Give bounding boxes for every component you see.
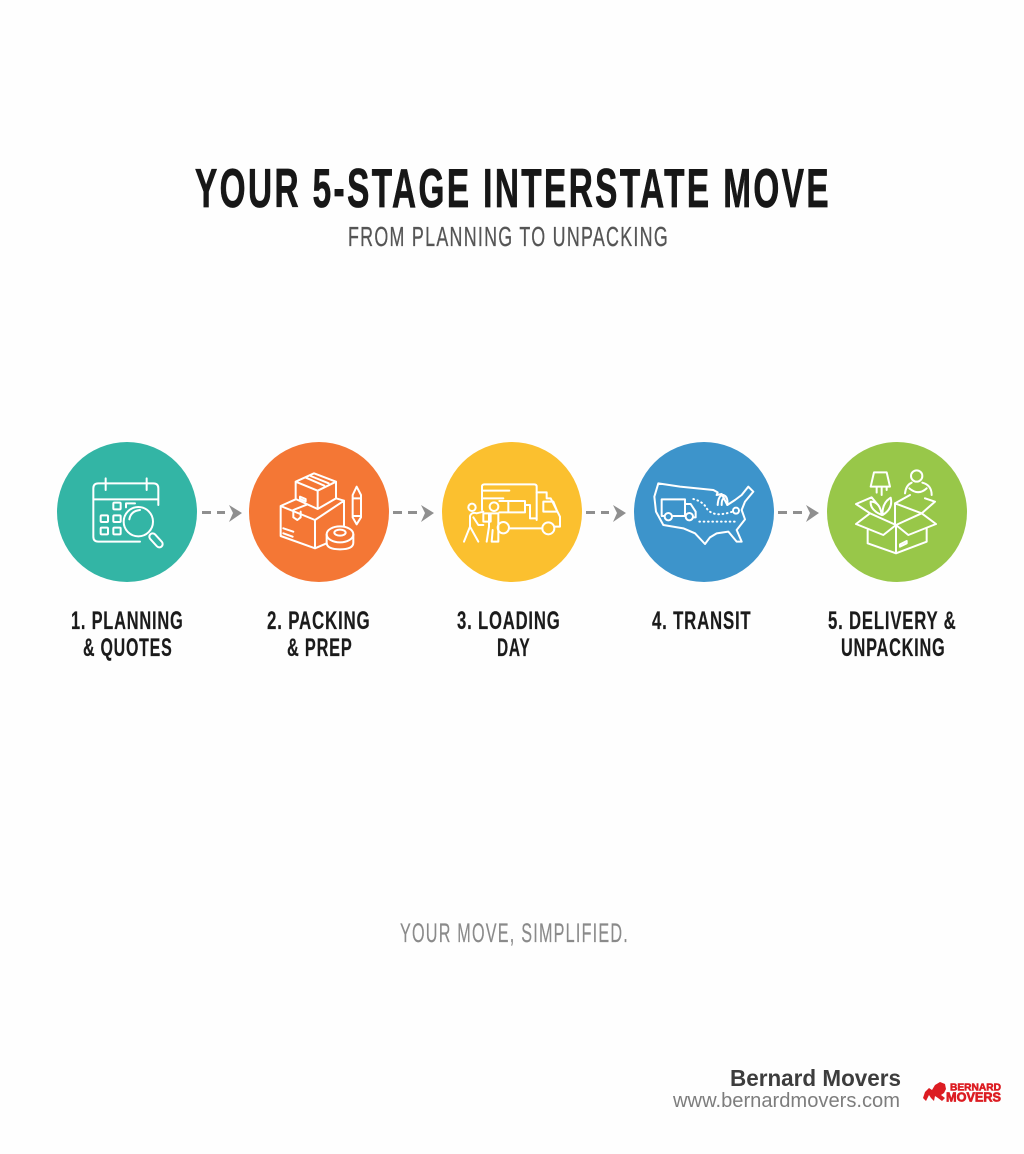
label: delivery and unpacking: 5. DELIVERY & bbox=[828, 607, 956, 635]
icon: open box with lamp, plant and person bbox=[856, 470, 936, 553]
footer: company name: Bernard Movers bbox=[730, 1065, 901, 1091]
label: loading day: 3. LOADING bbox=[457, 607, 560, 635]
footer: website: www.bernardmovers.com bbox=[672, 1090, 900, 1112]
icon: boxes, tape and pencil bbox=[281, 473, 361, 549]
teal circle bbox=[57, 442, 197, 582]
arrow: stage 2 to 3 bbox=[393, 505, 434, 522]
label: planning and quotes bbox=[71, 607, 184, 662]
icon: red lion and mover bbox=[923, 1082, 946, 1101]
label: delivery and unpacking: UNPACKING bbox=[841, 634, 946, 662]
label: planning and quotes: & QUOTES bbox=[83, 634, 172, 662]
label: delivery and unpacking bbox=[828, 607, 956, 662]
icon: calendar with magnifier bbox=[93, 478, 159, 544]
arrow: stage 3 to 4 bbox=[586, 505, 626, 522]
icon: US map with truck route bbox=[654, 483, 753, 544]
panel: stage 1 planning and quotes bbox=[57, 442, 197, 662]
label: packing and prep bbox=[267, 607, 370, 662]
arrow: stage 1 to 2 bbox=[202, 505, 242, 522]
tagline: YOUR MOVE, SIMPLIFIED. bbox=[400, 918, 629, 948]
label: loading day bbox=[457, 607, 560, 662]
logo wordmark: MOVERS bbox=[946, 1090, 1001, 1104]
panel: stage 5 delivery and unpacking bbox=[827, 442, 967, 662]
label: planning and quotes: 1. PLANNING bbox=[71, 607, 184, 635]
logo wordmark bbox=[946, 1082, 1001, 1104]
orange circle bbox=[249, 442, 389, 582]
panel: stage 2 packing and prep bbox=[249, 442, 389, 662]
blue circle bbox=[634, 442, 774, 582]
label: packing and prep: 2. PACKING bbox=[267, 607, 370, 635]
green circle bbox=[827, 442, 967, 582]
yellow circle bbox=[442, 442, 582, 582]
panel: stage 3 loading day bbox=[442, 442, 582, 662]
label: transit: 4. TRANSIT bbox=[652, 607, 752, 635]
panel: stage 4 transit bbox=[634, 442, 774, 635]
logo wordmark: BERNARD bbox=[950, 1082, 1001, 1094]
logo: Bernard Movers bbox=[923, 1082, 1001, 1104]
icon: movers loading truck bbox=[464, 484, 560, 542]
arrow: stage 4 to 5 bbox=[778, 505, 819, 522]
label: packing and prep: & PREP bbox=[287, 634, 352, 662]
label: loading day: DAY bbox=[497, 634, 530, 662]
subtitle: FROM PLANNING TO UNPACKING bbox=[348, 221, 669, 252]
